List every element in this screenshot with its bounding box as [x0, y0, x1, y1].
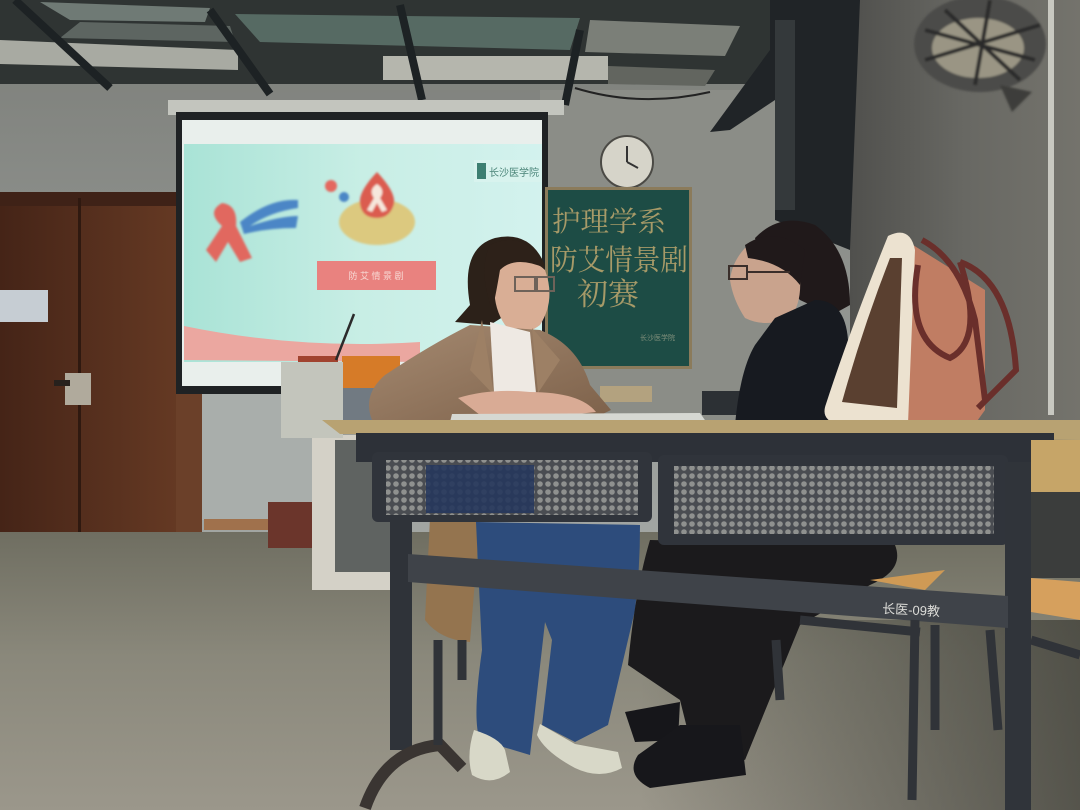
- desk: [322, 413, 1080, 810]
- board small note: 长沙医学院: [640, 333, 675, 342]
- slide title banner: [317, 261, 436, 290]
- slide badge icon: [325, 172, 415, 245]
- board heading line 2: 防艾情景剧: [550, 238, 688, 279]
- slide logo: [474, 160, 542, 182]
- slide title banner: 防 艾 情 景 剧: [348, 270, 404, 281]
- right concrete wall and pillar: [710, 0, 1080, 440]
- table top: [322, 420, 1080, 440]
- mesh panels: [372, 452, 652, 522]
- board heading line 1: 护理学系: [552, 200, 666, 240]
- person on the left: [369, 237, 640, 780]
- face: [494, 257, 549, 332]
- jacket: [369, 325, 611, 420]
- wall fan: [914, 0, 1046, 112]
- projection screen: [176, 112, 548, 394]
- black coat: [735, 300, 848, 425]
- black skirt and legs: [628, 540, 897, 760]
- ceiling with lights: [0, 0, 860, 115]
- slide ribbon comet icon: [206, 200, 298, 262]
- brown suede panel: [842, 258, 902, 408]
- wooden door: [0, 192, 202, 532]
- person on the right: [625, 221, 897, 788]
- podium, speaker and microphone: [268, 314, 740, 590]
- board heading line 3: 初赛: [577, 269, 639, 314]
- glasses: [729, 266, 790, 279]
- slide logo: 长沙医学院: [489, 166, 539, 179]
- hands: [458, 391, 596, 418]
- glasses: [515, 277, 554, 291]
- hair: [755, 221, 850, 315]
- desk label: 长医-09教: [882, 601, 940, 619]
- face: [730, 246, 800, 323]
- shirt: [490, 322, 536, 393]
- blackboard: [545, 187, 692, 369]
- jeans: [476, 522, 640, 755]
- wall clock: [601, 136, 653, 188]
- back wall: [0, 0, 1080, 540]
- long coat hem: [425, 518, 480, 642]
- desk papers: [450, 413, 707, 423]
- chairs: [438, 440, 1080, 800]
- floor: [0, 519, 1080, 810]
- white sneakers: [469, 730, 510, 780]
- boots: [625, 702, 680, 742]
- tote bag: [824, 233, 1016, 424]
- legs and crossbar: [390, 520, 412, 750]
- hair back: [455, 237, 545, 325]
